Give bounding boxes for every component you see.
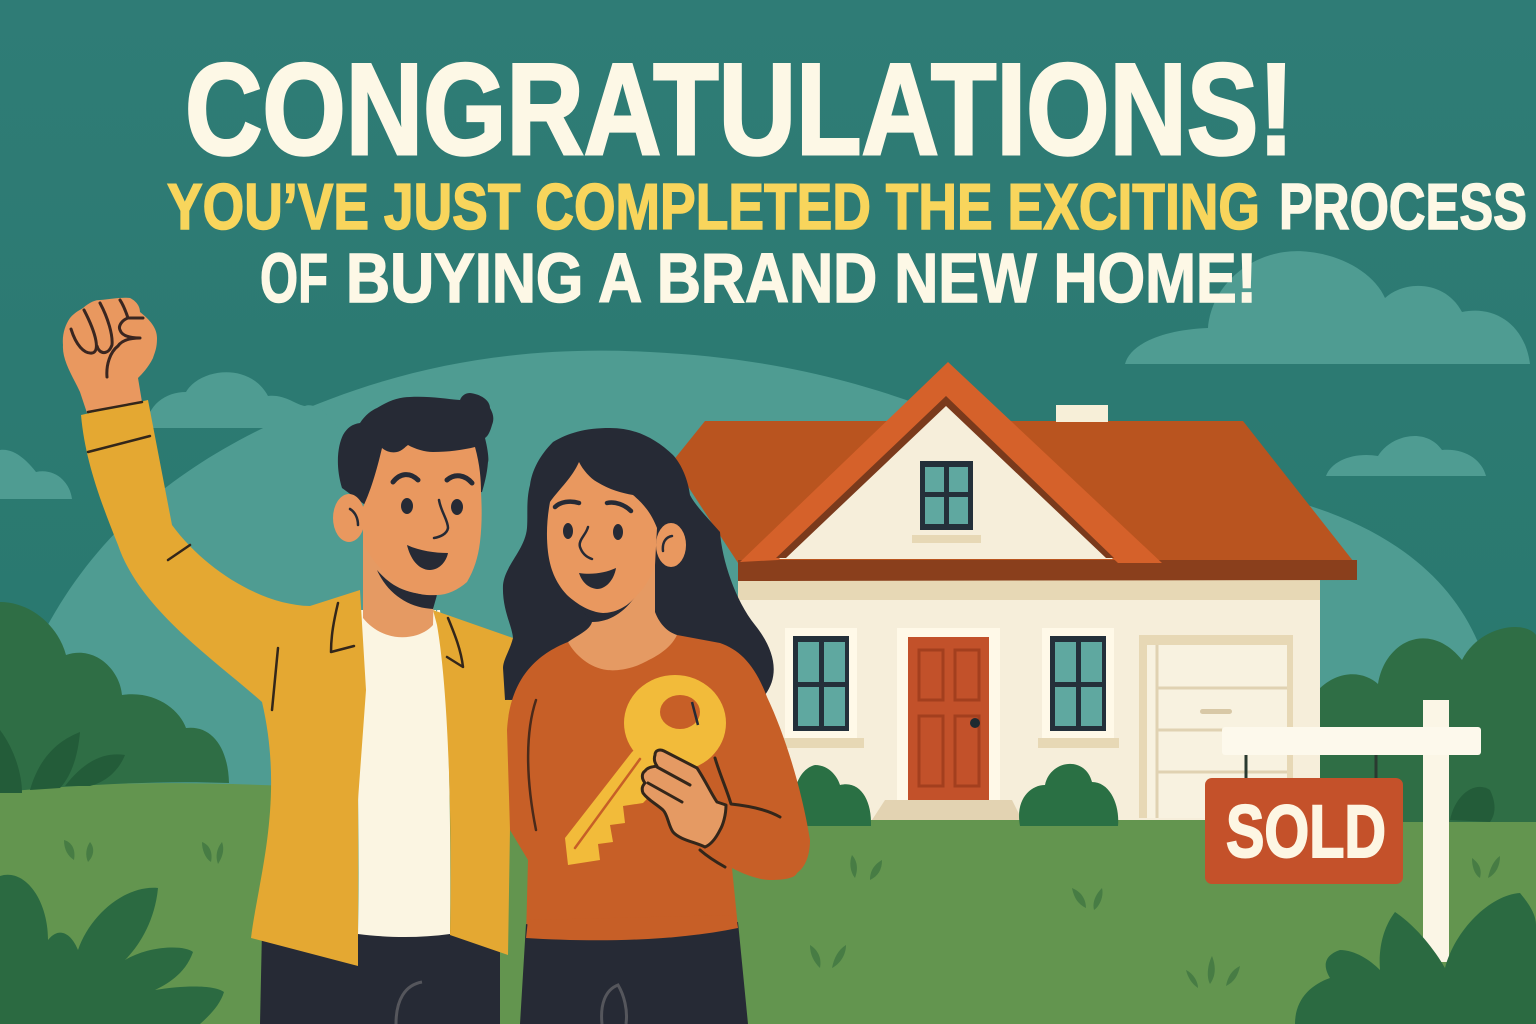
sign post [1423,700,1449,962]
woman: face [547,462,657,613]
man [63,298,513,1024]
woman: eyes and smile [528,502,672,830]
sign arm [1222,727,1481,755]
man: face details [350,475,472,570]
woman [503,428,810,1024]
clouds [0,251,1530,499]
title: CONGRATULATIONS! [185,36,1294,182]
cloud: top right [1125,251,1530,364]
left window [777,628,864,748]
house: gable wall [778,398,1113,559]
woman: neck and chest [568,560,677,670]
grass tufts [64,840,1500,988]
sold label: SOLD [1226,790,1386,873]
man: hair [338,393,493,507]
bush: bottom left [0,875,224,1024]
porch bushes [793,765,871,826]
man: jacket [81,400,366,966]
woman: hair back [503,428,774,700]
bush: bottom right [1295,893,1536,1024]
man: head [363,445,482,595]
cloud: mid right [1326,436,1486,476]
subtitle line two: rest: BUYING A BRAND NEW HOME! [346,239,1257,317]
teal gap right of beard [436,590,452,612]
foreground bushes [0,875,1536,1024]
man: dark beard shadow [377,570,437,609]
house: wall [738,578,1320,820]
ground [0,783,1536,1024]
woman: trousers [520,922,748,1024]
chimney [1056,405,1108,422]
house: gable roof [740,362,1162,563]
man: t-shirt [358,610,450,937]
house [672,362,1357,826]
left bushes [0,602,229,793]
subtitle line two: of: OF [260,239,328,317]
woman: jaw shadow [570,594,637,622]
cloud: far left [0,450,72,499]
right window [1038,628,1119,748]
key [565,675,726,865]
right bushes [1318,627,1536,822]
man: trousers [260,930,500,1024]
man: jacket details [88,402,463,710]
sold sign [1205,700,1481,962]
sold board [1205,778,1403,884]
cloud: left of man [145,372,338,428]
woman: sweater [507,635,810,940]
woman: ear [656,523,686,567]
front door [872,628,1022,820]
house: eave band [738,560,1357,581]
man: fist [63,298,157,413]
attic window [912,461,981,543]
man: ear [333,494,365,542]
man: neck [363,535,435,637]
house: main roof [672,421,1357,566]
background hills [40,351,1490,800]
hanger chains [1246,755,1376,780]
woman: hand [642,750,780,867]
subtitle line one, yellow: YOU’VE JUST COMPLETED THE EXCITING [167,170,1260,243]
man: fist finger lines [71,300,143,377]
garage door [1139,635,1293,818]
